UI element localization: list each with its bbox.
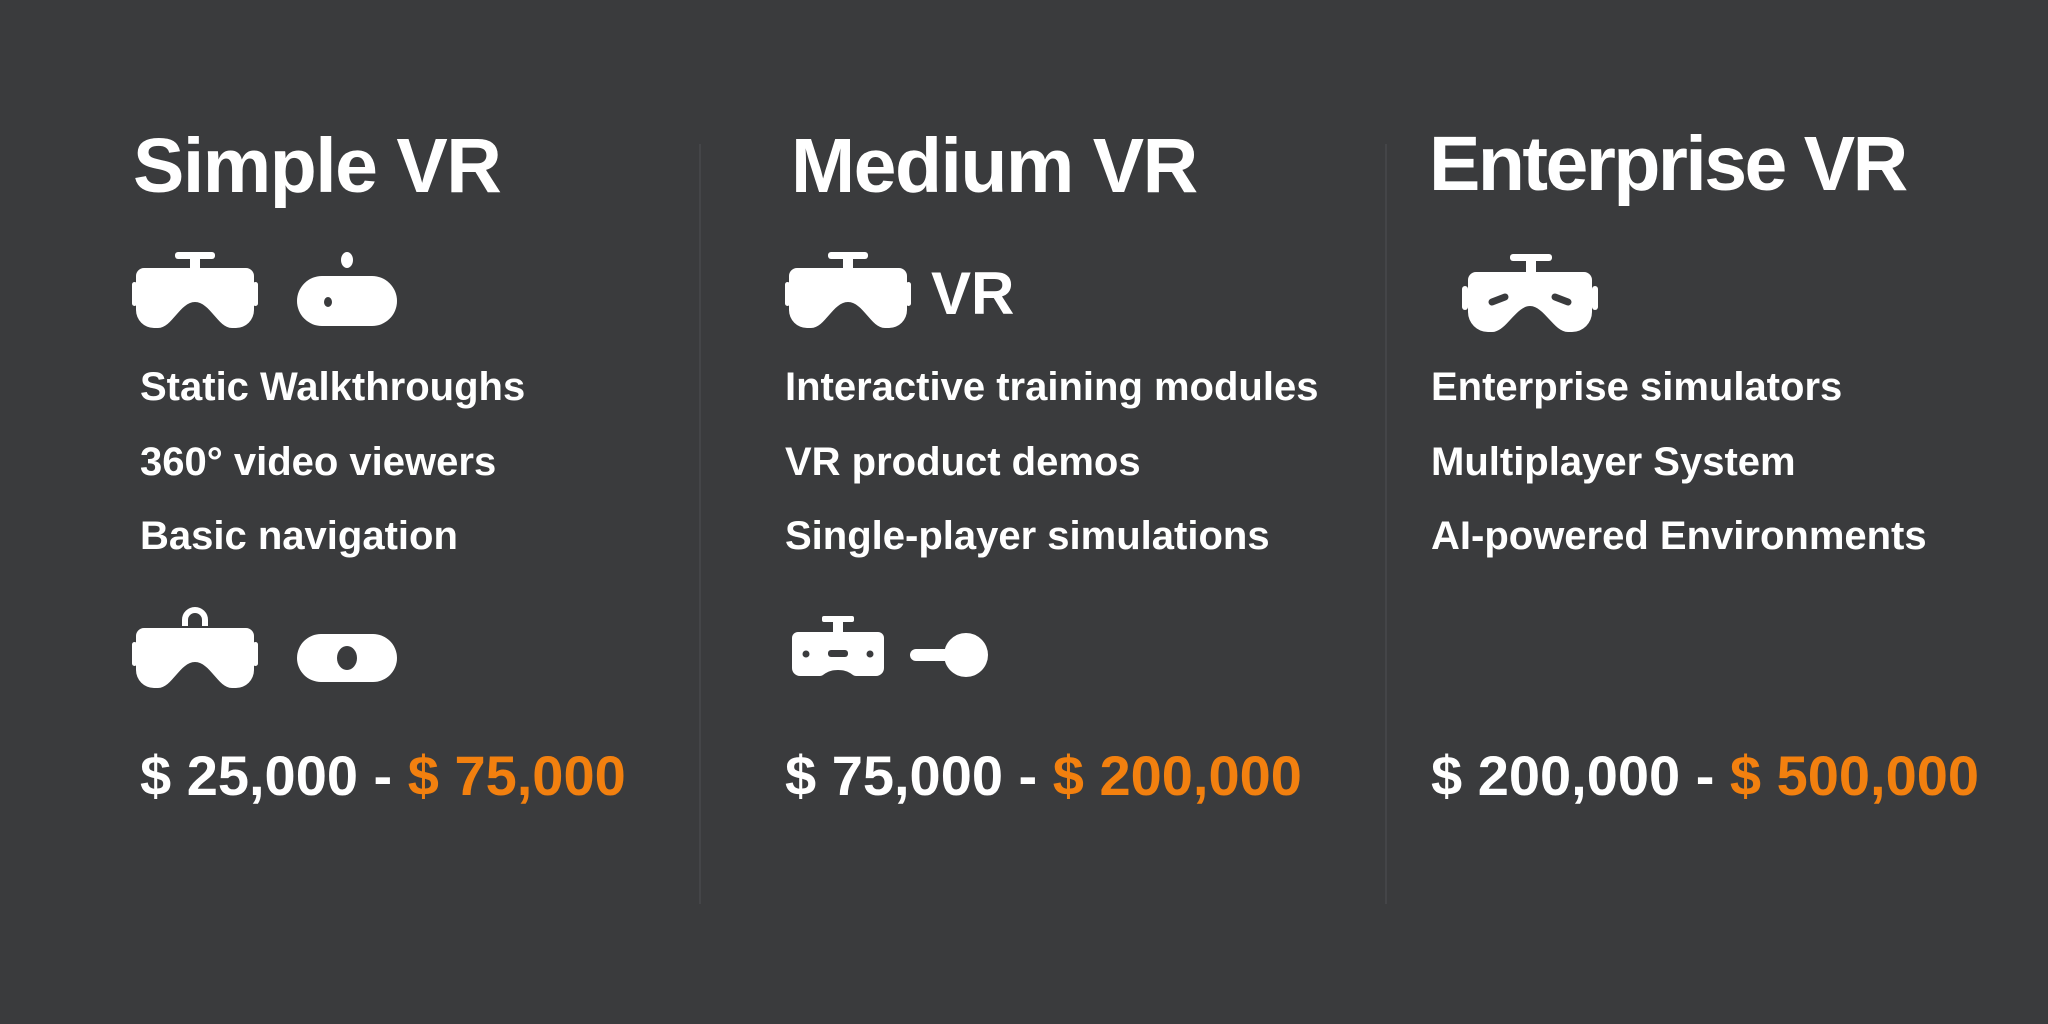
text: Static Walkthroughs — [140, 365, 525, 409]
title: Enterprise VR: Enterprise VR — [1429, 121, 1906, 207]
list: enterprise — [1431, 365, 1927, 558]
title: Medium VR: Medium VR — [791, 123, 1197, 209]
icon: headset medium with VR: VR — [931, 260, 1014, 327]
text: Interactive training modules — [785, 365, 1318, 409]
text: 360° video viewers — [140, 440, 496, 484]
icon: controller 2 — [297, 634, 397, 682]
price: simple: $ 25,000 - $ 75,000 — [140, 744, 626, 807]
list: medium — [785, 365, 1318, 558]
icon: headset 2 — [132, 607, 258, 688]
price: medium: $ 75,000 - $ 200,000 — [785, 744, 1302, 807]
price: enterprise: $ 200,000 - $ 500,000 — [1431, 744, 1979, 807]
icon: controller simple — [297, 252, 397, 326]
text: Multiplayer System — [1431, 440, 1796, 484]
list: simple — [140, 365, 525, 558]
text: VR product demos — [785, 440, 1141, 484]
title: Simple VR: Simple VR — [133, 123, 500, 209]
icon: headset simple — [132, 252, 258, 328]
icon: headset medium with VR — [785, 252, 1014, 328]
icon: enterprise headset — [1462, 254, 1598, 332]
text: Enterprise simulators — [1431, 365, 1842, 409]
text: Basic navigation — [140, 514, 458, 558]
text: AI-powered Environments — [1431, 514, 1927, 558]
text: Single-player simulations — [785, 514, 1270, 558]
icon: compact headset — [792, 616, 884, 676]
icon: wand controller — [910, 633, 988, 677]
